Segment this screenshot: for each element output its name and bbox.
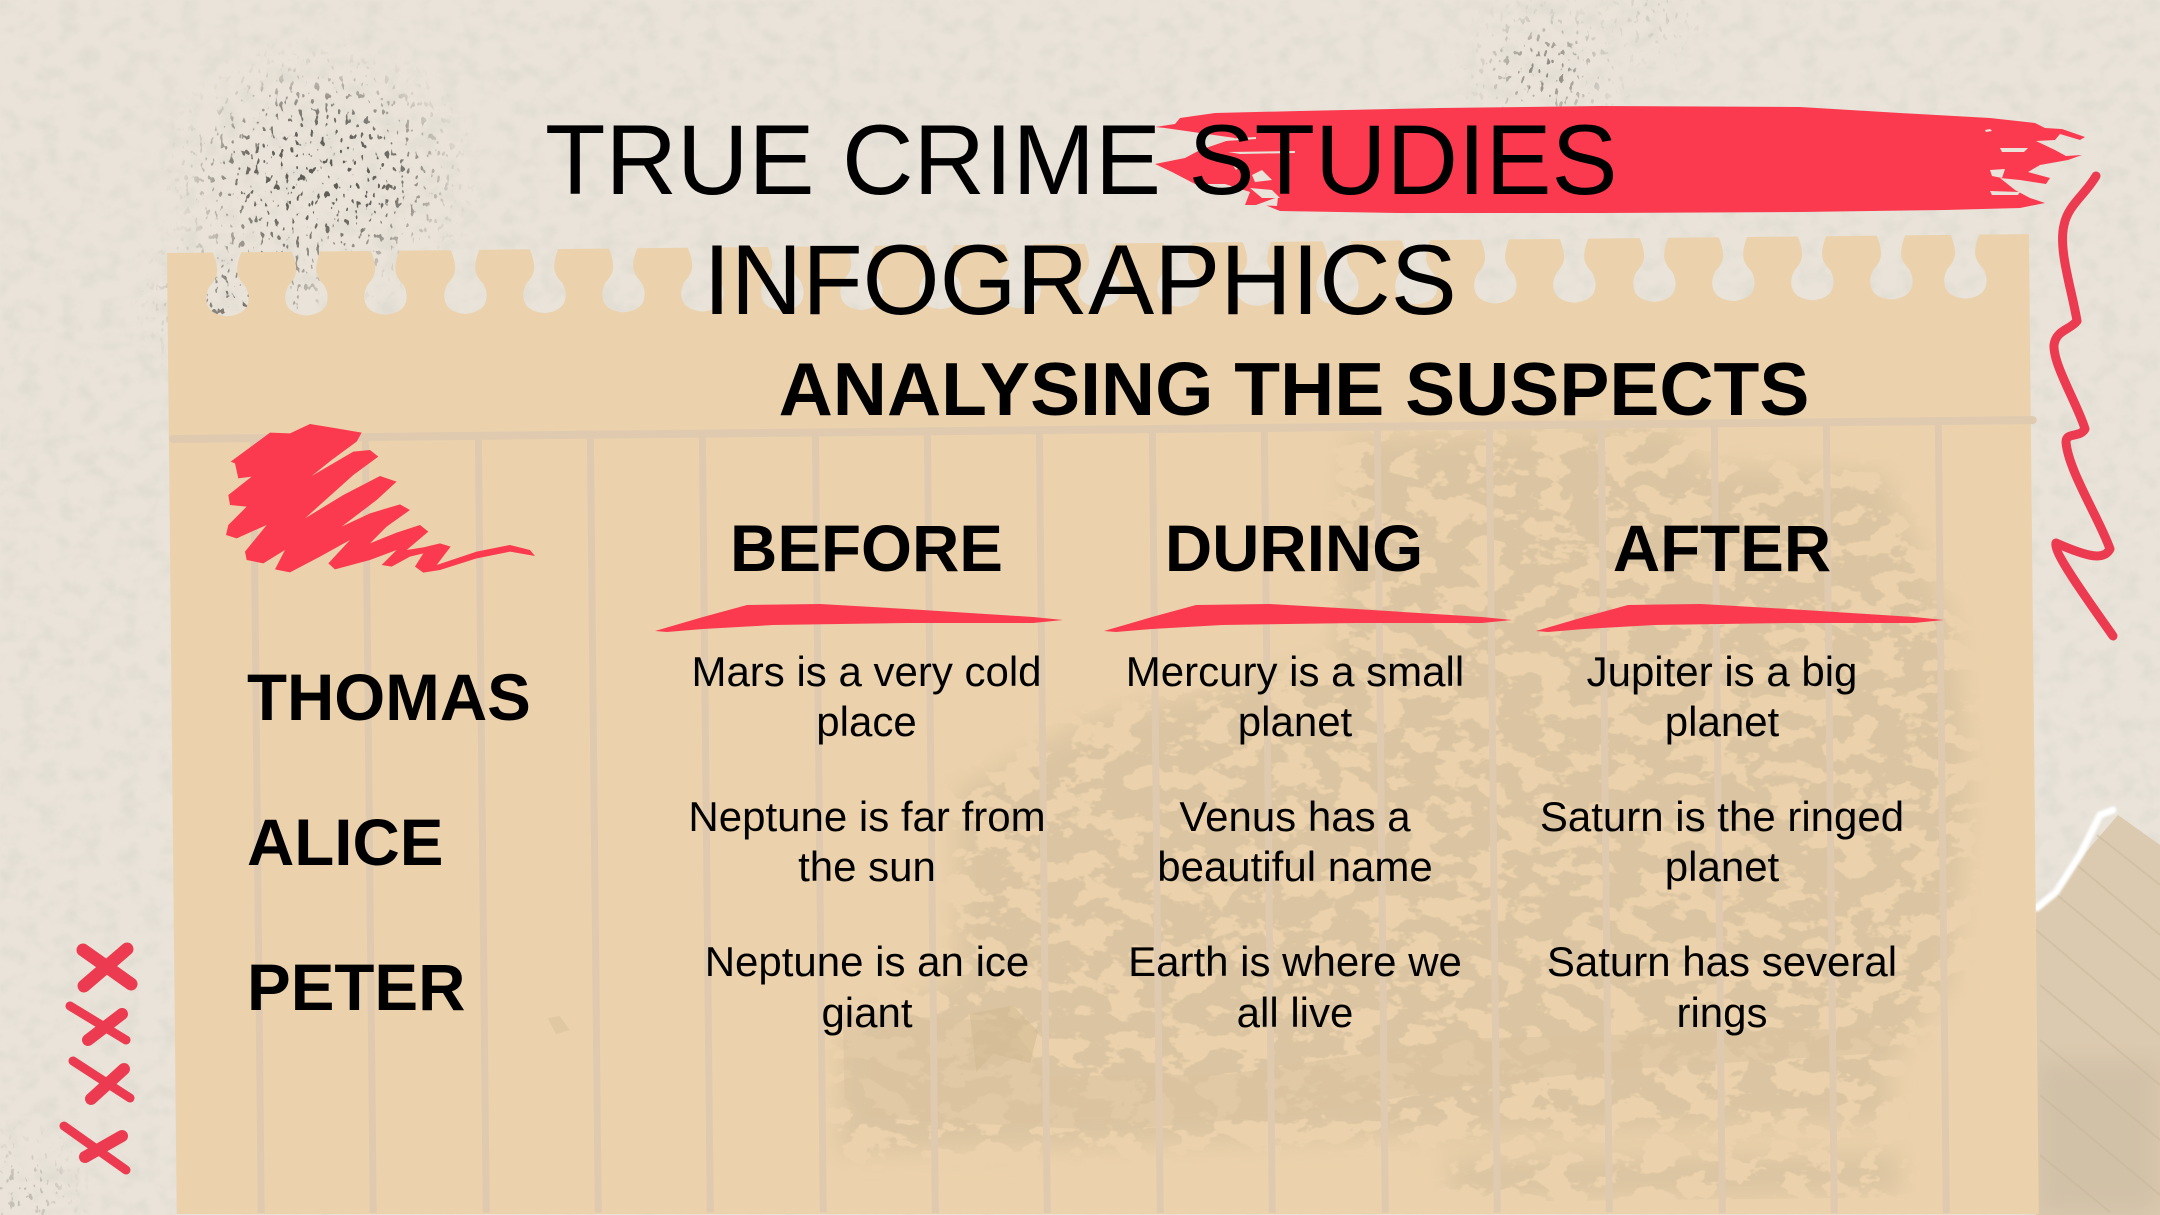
title: INFOGRAPHICS <box>703 224 1457 335</box>
column heading: before: BEFORE <box>730 512 1003 585</box>
red scribble <box>226 424 535 573</box>
cell: Peter after: Saturn has several <box>1547 938 1897 985</box>
X mark 4 <box>64 1126 126 1170</box>
cell: Thomas before <box>691 648 1042 745</box>
cell: Peter before: Neptune is an ice <box>705 938 1029 985</box>
icon: four red X marks <box>64 949 131 1170</box>
cell: Thomas after: planet <box>1665 698 1780 745</box>
cell: Alice during <box>1157 793 1433 890</box>
cell: Thomas after: Jupiter is a big <box>1587 648 1857 695</box>
ruled vertical lines <box>250 421 1950 1215</box>
title <box>545 104 1618 335</box>
cell: Alice during: beautiful name <box>1157 843 1433 890</box>
cell: Thomas before: place <box>816 698 917 745</box>
cell: Peter after: rings <box>1676 989 1768 1036</box>
ruled horizontal line <box>169 416 2037 443</box>
subtitle: ANALYSING THE SUSPECTS <box>779 347 1809 431</box>
cell: Peter during: Earth is where we <box>1128 938 1462 985</box>
row label: Peter: PETER <box>247 951 465 1024</box>
cell: Alice after: planet <box>1665 843 1780 890</box>
cell: Thomas during: planet <box>1238 698 1353 745</box>
red squiggle line, right margin <box>2054 176 2113 636</box>
torn paper scrap, bottom right <box>2036 810 2160 1215</box>
cell: Peter before: giant <box>821 989 913 1036</box>
panel: notebook paper <box>167 234 2045 1215</box>
X mark 2 <box>70 1006 126 1040</box>
ink watermark on paper <box>832 422 1975 1205</box>
cell: Alice before: Neptune is far from <box>688 793 1046 840</box>
cell: Peter during: all live <box>1237 989 1353 1036</box>
row label: Alice: ALICE <box>247 806 444 879</box>
cell: Peter during <box>1128 938 1462 1036</box>
cell: Alice after <box>1540 793 1904 890</box>
X mark 3 <box>73 1061 130 1099</box>
cell: Thomas during: Mercury is a small <box>1126 648 1464 695</box>
cell: Thomas after <box>1587 648 1857 745</box>
cell: Alice before <box>688 793 1046 890</box>
column heading: after <box>1536 512 1944 632</box>
X mark 1 <box>83 949 131 986</box>
column heading: before <box>655 512 1063 632</box>
column heading: during: DURING <box>1165 512 1423 585</box>
darker watermark band <box>548 997 1899 1136</box>
cell: Thomas before: Mars is a very cold <box>691 648 1042 695</box>
cell: Peter after <box>1547 938 1897 1036</box>
red brush stroke behind title <box>1155 106 2085 213</box>
cell: Alice during: Venus has a <box>1179 793 1411 840</box>
column heading: during <box>1104 512 1512 632</box>
cell: Peter before <box>705 938 1029 1036</box>
cell: Alice before: the sun <box>798 843 936 890</box>
row label: Thomas: THOMAS <box>247 661 531 734</box>
cell: Thomas during <box>1126 648 1464 745</box>
title: TRUE CRIME STUDIES <box>545 104 1618 215</box>
cell: Alice after: Saturn is the ringed <box>1540 793 1904 840</box>
column heading: after: AFTER <box>1613 512 1831 585</box>
